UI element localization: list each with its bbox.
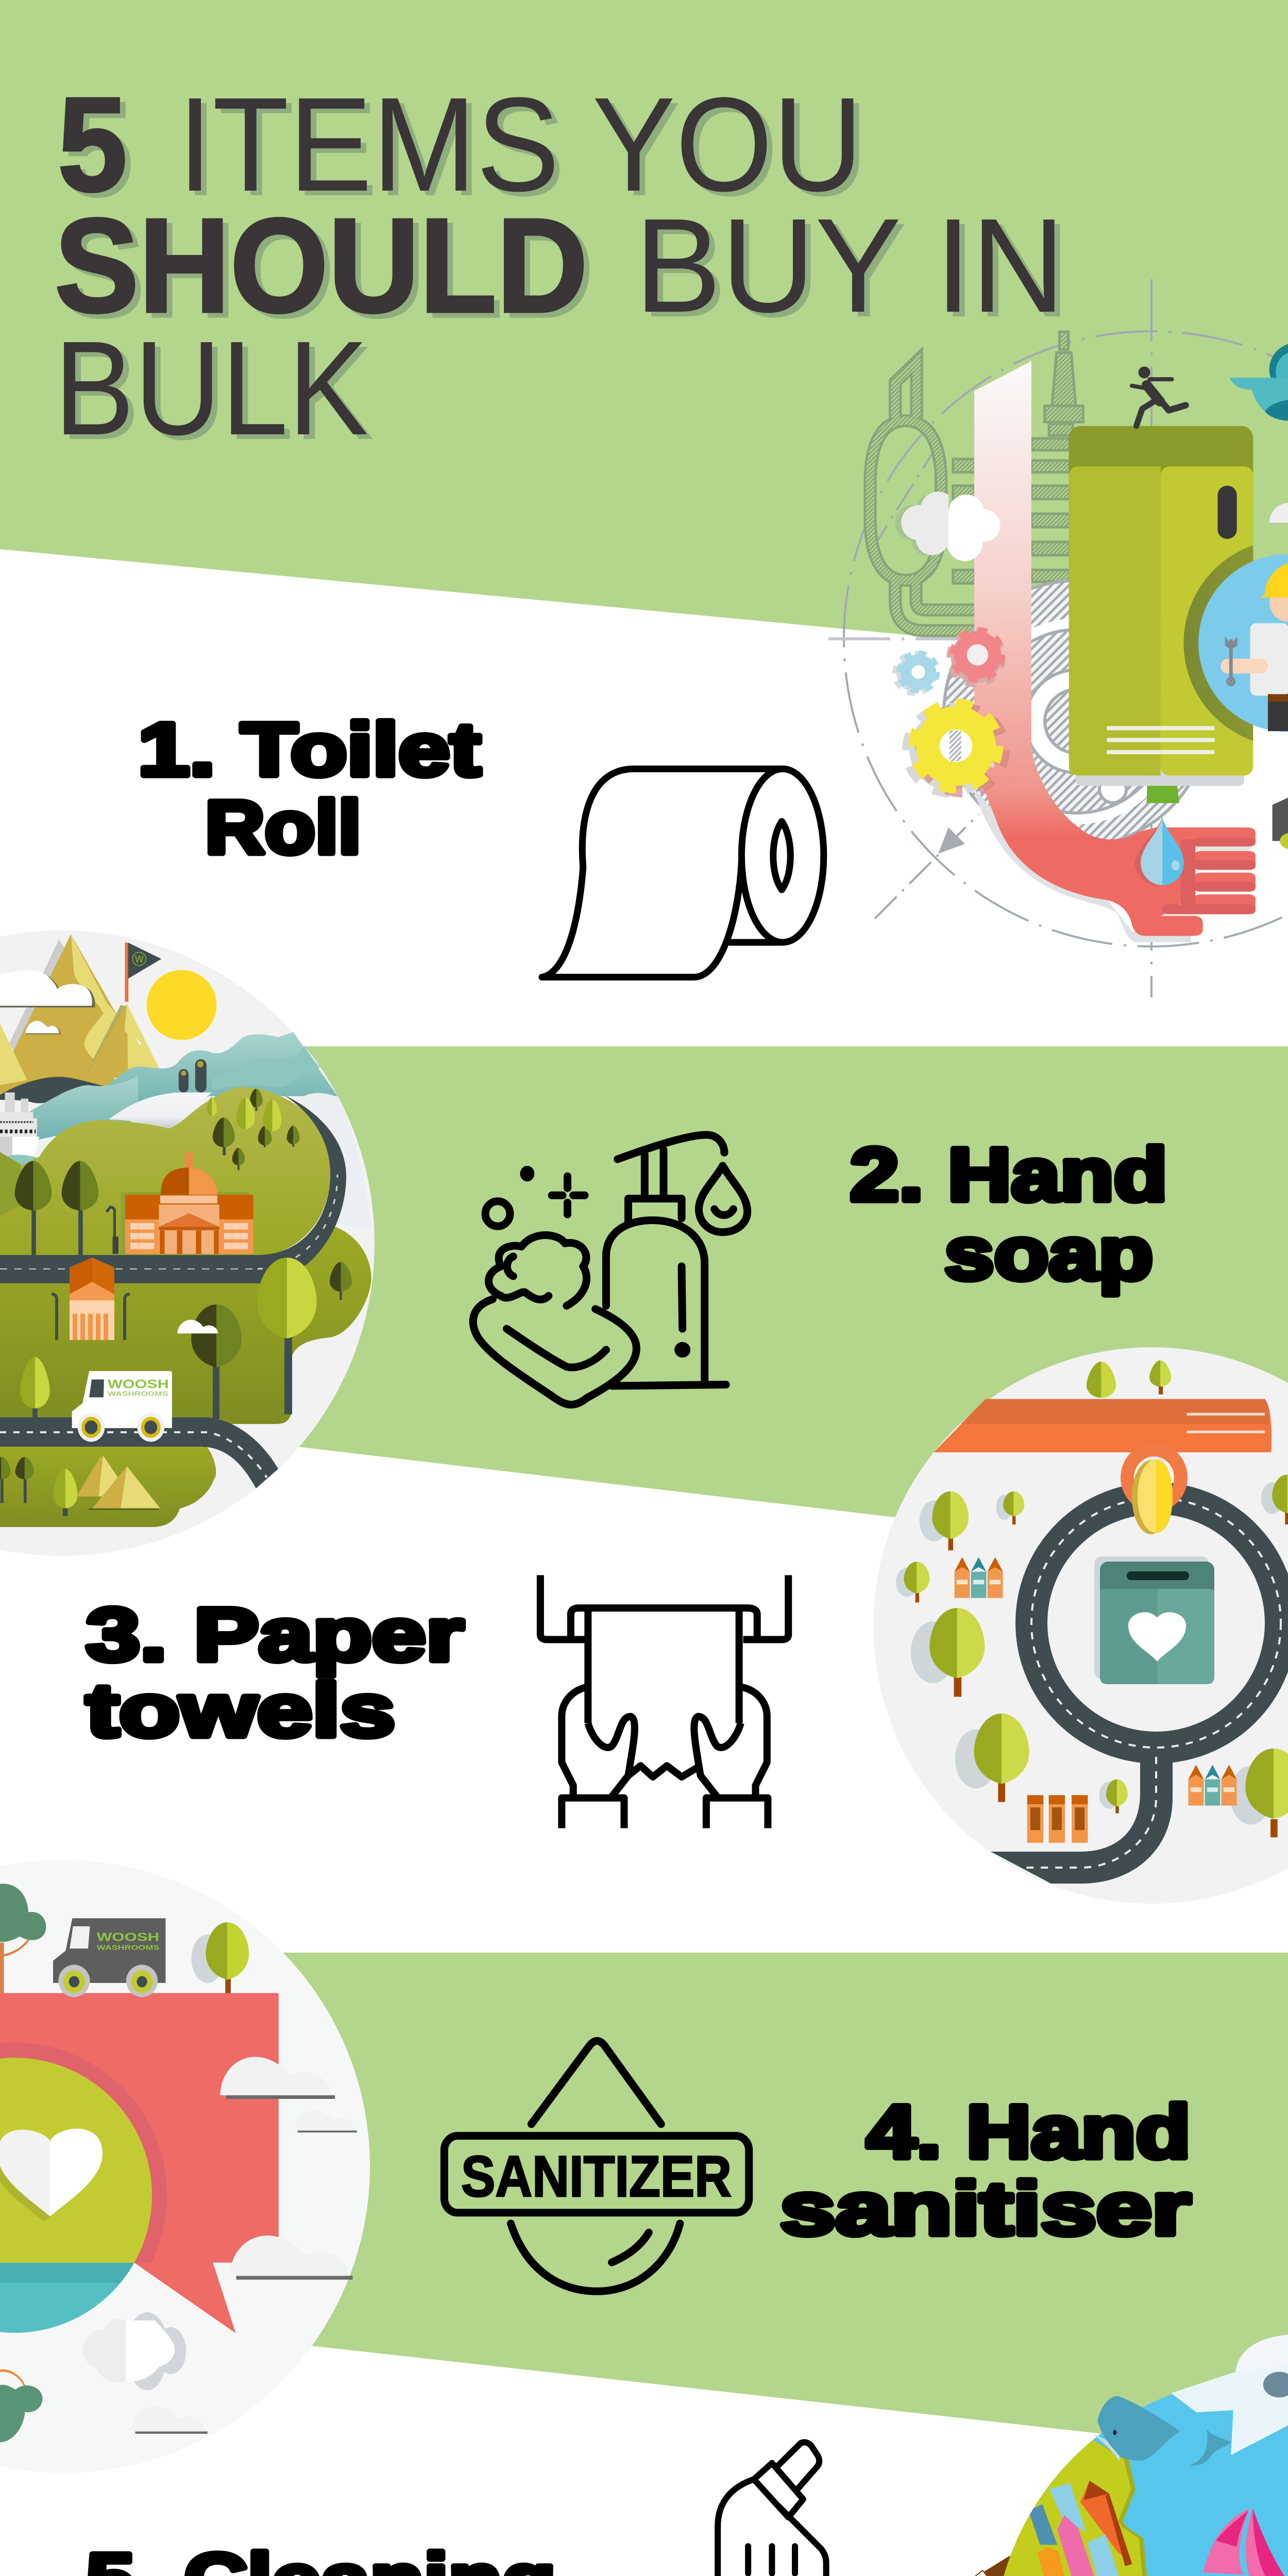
white woosh van — [72, 1371, 172, 1442]
title — [54, 70, 1065, 463]
blue gear — [896, 654, 936, 692]
houses lower — [1189, 1765, 1236, 1806]
bottom-left tree — [0, 2370, 43, 2443]
water drop — [1135, 817, 1184, 886]
large cloud — [0, 970, 95, 1007]
heart — [1128, 1612, 1186, 1662]
title: BUY IN — [635, 191, 1065, 341]
lower trees — [0, 1357, 78, 1516]
right snow slope — [299, 1093, 371, 1230]
brown mountain behind globe — [965, 2555, 1010, 2576]
icon: toilet roll — [542, 769, 824, 977]
top-left tree — [0, 1884, 46, 1993]
puffy cloud — [83, 2312, 186, 2391]
title: 5 — [58, 70, 127, 219]
pink sailboat — [1194, 2509, 1288, 2576]
green banner: hand soap — [0, 1046, 1288, 1564]
hand fingers — [1156, 827, 1256, 916]
teal water — [0, 2263, 134, 2333]
continent shadow — [1004, 2440, 1147, 2576]
illustration: washroom dispenser machine — [828, 279, 1288, 997]
pale circle — [873, 1347, 1288, 1904]
lamps by house — [52, 1294, 130, 1340]
blue ocean — [993, 2377, 1288, 2576]
lamp post — [107, 1207, 114, 1254]
illustration: green landscape with van — [0, 930, 375, 1556]
illustration: speech bubble with heart — [0, 1860, 370, 2473]
roads — [0, 1095, 346, 1488]
heading: 3. Paper towels — [86, 1592, 464, 1752]
icon: sanitizer drop label: SANITIZER — [461, 2144, 732, 2209]
orange ring — [1127, 1450, 1181, 1505]
green donation box — [1094, 1556, 1214, 1684]
domed civic building — [121, 1152, 253, 1254]
icon: cleaning bottle — [718, 2442, 826, 2576]
small cloud right edge — [1269, 503, 1288, 522]
cruise ship — [0, 1092, 42, 1172]
illustration: road ring with donation box — [873, 1347, 1288, 1904]
red arm and hand — [974, 361, 1203, 936]
cloud at bubble tail — [230, 2235, 352, 2280]
heart — [0, 2129, 103, 2222]
dark woosh van — [53, 1918, 165, 1997]
snow patch — [108, 1092, 212, 1128]
heading: 4. Hand sanitiser: 4. Hand — [867, 2090, 1191, 2174]
icon: paper towels and hands — [540, 1575, 788, 1828]
pale circle — [0, 930, 375, 1556]
mountains — [0, 934, 160, 1100]
heading: 1. Toilet Roll: 1. Toilet — [138, 707, 481, 791]
arm shadow — [972, 787, 1191, 942]
worker in circle — [1183, 539, 1288, 747]
heading: 3. Paper towels: 3. Paper — [86, 1592, 464, 1676]
iceberg — [1171, 2335, 1288, 2455]
yellow gear — [909, 706, 1003, 790]
orange hand — [934, 1399, 1272, 1452]
white woosh van: WOOSH — [108, 1378, 169, 1392]
title: ITEMS YOU — [178, 70, 863, 219]
dispenser slot — [1217, 486, 1237, 539]
houses upper — [955, 1557, 1003, 1598]
illustration: earth globe — [965, 2335, 1288, 2576]
green nozzle — [1145, 774, 1179, 803]
dark woosh van: WASHROOMS — [97, 1944, 159, 1952]
teal bird — [1229, 344, 1288, 420]
city buildings — [1028, 2481, 1132, 2576]
hatched engine disc — [944, 581, 1210, 846]
small cloud over land — [177, 1320, 218, 1333]
flag — [125, 943, 161, 1002]
heading: 4. Hand sanitiser — [780, 2090, 1191, 2250]
cloud on bubble — [221, 2057, 335, 2099]
lamp base — [113, 1236, 118, 1254]
dispenser shadow — [1076, 749, 1244, 786]
white cloud — [895, 492, 1001, 561]
small cloud — [25, 1021, 61, 1035]
icon: sanitizer drop label — [444, 2041, 749, 2291]
pale circle — [0, 1860, 370, 2473]
title: SHOULD — [55, 191, 588, 341]
icon: soap dispenser and hand — [473, 1135, 748, 1404]
tree shadows — [896, 1482, 1284, 1825]
running figure — [1132, 366, 1185, 426]
green dispenser box — [1069, 426, 1253, 775]
orange apartment blocks — [1027, 1795, 1088, 1843]
partial van at edge — [1273, 798, 1288, 850]
dispenser lines — [1107, 726, 1215, 754]
hatched pipes and tank — [870, 332, 1083, 634]
heading: 4. Hand sanitiser: sanitiser — [780, 2166, 1191, 2250]
heading: 2. Hand soap: soap — [944, 1211, 1153, 1295]
cloud low — [131, 2406, 208, 2434]
sun — [147, 970, 216, 1040]
whale — [1093, 2396, 1231, 2466]
yellow coin — [1132, 1460, 1173, 1534]
round trees — [904, 1475, 1288, 1837]
heading: 1. Toilet Roll: Roll — [205, 785, 361, 869]
trees on hill — [15, 1089, 352, 1300]
small cloud right — [294, 2110, 357, 2132]
box slot — [1127, 1571, 1189, 1580]
flag: W — [135, 954, 144, 964]
large bright tree — [257, 1258, 317, 1414]
bottom green land — [0, 1443, 216, 1527]
heading: 1. Toilet Roll — [138, 707, 481, 869]
heading: 2. Hand soap: 2. Hand — [850, 1132, 1167, 1216]
small orange house — [70, 1258, 114, 1340]
tree with shadow — [191, 1922, 249, 1993]
dark tree — [191, 1304, 242, 1419]
continent — [1004, 2440, 1143, 2576]
title: BULK — [54, 314, 368, 463]
pyramids — [76, 1455, 160, 1510]
technical drawing guide circle — [828, 279, 1288, 997]
heading: 3. Paper towels: towels — [86, 1668, 395, 1752]
penguins — [179, 1059, 207, 1092]
dark woosh van: WOOSH — [97, 1930, 159, 1944]
white woosh van: WASHROOMS — [108, 1389, 168, 1398]
lower green land — [0, 1227, 371, 1424]
heading: 2. Hand soap — [850, 1132, 1167, 1295]
trees above hand — [1087, 1360, 1171, 1398]
sea waves — [0, 1032, 337, 1159]
pink gear — [951, 631, 1001, 683]
green hill — [0, 1087, 330, 1257]
dark ring — [0, 2043, 167, 2263]
green banner: hand sanitiser — [0, 1953, 1288, 2454]
road ring — [991, 1498, 1281, 1884]
olive disc — [0, 2058, 152, 2263]
green banner: title area — [0, 0, 1288, 671]
red speech bubble — [0, 1993, 279, 2333]
land left hill — [0, 1152, 21, 1216]
